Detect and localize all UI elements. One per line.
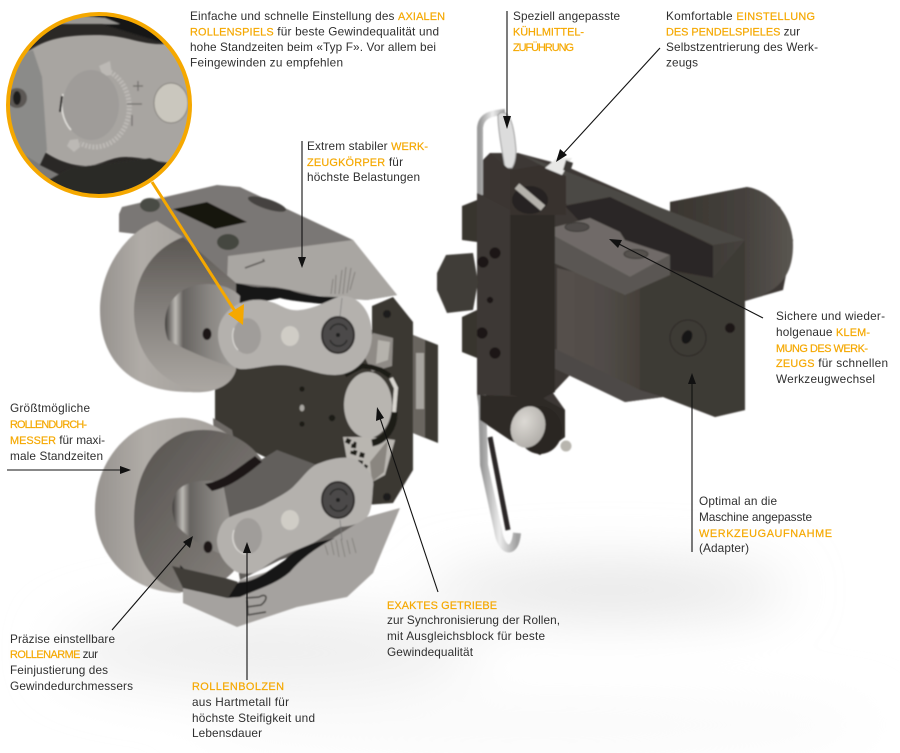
tool clamp <box>543 218 670 295</box>
text: adapter: Maschine angepasste <box>699 510 812 524</box>
product: right tool adapter <box>437 112 793 548</box>
side tabs and hex nut <box>437 200 478 358</box>
text: roller bolts: Lebensdauer <box>192 726 262 740</box>
arrow: gear <box>376 407 438 592</box>
coolant tube upper <box>480 112 516 195</box>
lower strip <box>543 343 663 402</box>
arrow: roller arms <box>112 536 193 630</box>
text: coolant supply <box>513 9 620 54</box>
text: adapter <box>699 494 832 555</box>
text: axial roller play: Feingewinden zu empfehlen <box>190 56 343 70</box>
text: coolant supply: Speziell angepasste <box>513 9 620 23</box>
vertical coolant plate <box>476 153 566 455</box>
text: adapter: (Adapter) <box>699 541 749 555</box>
upper jaw gap <box>228 282 340 305</box>
text: roller diameter: Größtmögliche <box>10 401 90 415</box>
product: left roller head <box>95 185 438 627</box>
text: tool clamping <box>776 309 888 386</box>
text: gear: EXAKTES GETRIEBE <box>387 600 497 612</box>
text: roller bolts <box>192 681 315 740</box>
text: coolant supply: KÜHLMITTEL- <box>513 26 584 38</box>
text: tool body: höchste Belastungen <box>307 170 420 184</box>
gear housing back plate <box>215 297 438 505</box>
upper body top plate <box>119 185 397 300</box>
text: pendulum play: DES PENDELSPIELES zur <box>666 24 800 38</box>
text: roller arms: Gewindedurchmessers <box>10 679 133 693</box>
adjustment knob top <box>512 158 573 214</box>
text: adapter: Optimal an die <box>699 494 777 508</box>
adjustment knob bottom <box>505 402 572 454</box>
text: tool clamping: Werkzeugwechsel <box>776 372 875 386</box>
text: roller arms: ROLLENARME zur <box>10 647 98 661</box>
arrow: axial play magnifier pointer <box>152 182 244 325</box>
lower roller arm plate <box>217 458 373 574</box>
text: axial roller play: hohe Standzeiten beim «Typ F». Vor allem bei <box>190 40 436 54</box>
lower adapter block <box>640 240 745 417</box>
text: tool body: Extrem stabiler WERK- <box>307 139 428 153</box>
text: pendulum play: zeugs <box>666 56 698 70</box>
text: gear: zur Synchronisierung der Rollen, <box>387 613 560 627</box>
lower roller <box>95 418 262 593</box>
text: tool clamping: MUNG DES WERK- <box>776 343 868 355</box>
arrow: pendulum play <box>556 48 660 162</box>
coolant tube lower <box>482 395 517 548</box>
text: roller diameter: MESSER für maxi- <box>10 433 105 447</box>
upper body front face <box>227 240 397 300</box>
text: axial roller play: Einfache und schnelle Einstellung des AXIALEN <box>190 9 445 23</box>
upper roller arm shaft <box>165 284 240 368</box>
text: tool clamping: ZEUGS für schnellen <box>776 356 888 370</box>
lower body <box>172 508 400 627</box>
text: roller bolts: ROLLENBOLZEN <box>192 681 284 693</box>
text: axial roller play: ROLLENSPIELS für beste Gewindequalität und <box>190 24 439 38</box>
text: axial roller play <box>190 9 445 70</box>
text: pendulum play: Komfortable EINSTELLUNG <box>666 9 815 23</box>
lower body rear block <box>205 450 367 580</box>
upper holder bar <box>518 153 745 245</box>
arrow: coolant <box>503 11 511 129</box>
text: coolant supply: ZUFÜHRUNG <box>513 42 574 54</box>
text: tool body <box>307 139 428 184</box>
text: gear: mit Ausgleichsblock für beste <box>387 629 545 643</box>
arrow: tool body <box>298 141 306 268</box>
adapter screw ring <box>670 320 735 356</box>
adapter cylinder <box>670 187 793 301</box>
magnifier: axial roller play detail <box>6 12 192 198</box>
text: roller arms: Präzise einstellbare <box>10 632 115 646</box>
text: roller diameter <box>10 401 105 463</box>
text: adapter: WERKZEUGAUFNAHME <box>699 528 832 540</box>
text: tool clamping: holgenaue KLEM- <box>776 325 870 339</box>
lower roller arm shaft <box>172 481 245 560</box>
text: pendulum play: Selbstzentrierung des Werk- <box>666 40 818 54</box>
adapter silhouette <box>477 153 793 455</box>
text: gear: Gewindequalität <box>387 645 474 659</box>
text: roller bolts: höchste Steifigkeit und <box>192 711 315 725</box>
text: tool clamping: Sichere und wieder- <box>776 309 885 323</box>
clamp channel <box>565 197 713 278</box>
floor shadows <box>60 568 880 745</box>
upper roller <box>100 221 240 392</box>
text: roller diameter: male Standzeiten <box>10 449 103 463</box>
upper roller arm plate <box>218 296 372 375</box>
text: roller arms: Feinjustierung des <box>10 663 108 677</box>
centre block <box>557 268 640 392</box>
gear train <box>343 333 396 482</box>
arrow: tool clamping <box>609 239 763 318</box>
arrow: roller bolts <box>243 542 251 680</box>
balancing block roller <box>344 372 392 438</box>
text: roller diameter: ROLLENDURCH- <box>10 419 87 431</box>
text: pendulum play <box>666 9 818 70</box>
text: roller bolts: aus Hartmetall für <box>192 695 289 709</box>
text: tool body: ZEUGKÖRPER für <box>307 155 403 169</box>
text: gear <box>387 600 560 659</box>
arrow: adapter <box>688 373 696 552</box>
arrow: roller diameter <box>7 466 131 474</box>
text: roller arms <box>10 632 133 693</box>
